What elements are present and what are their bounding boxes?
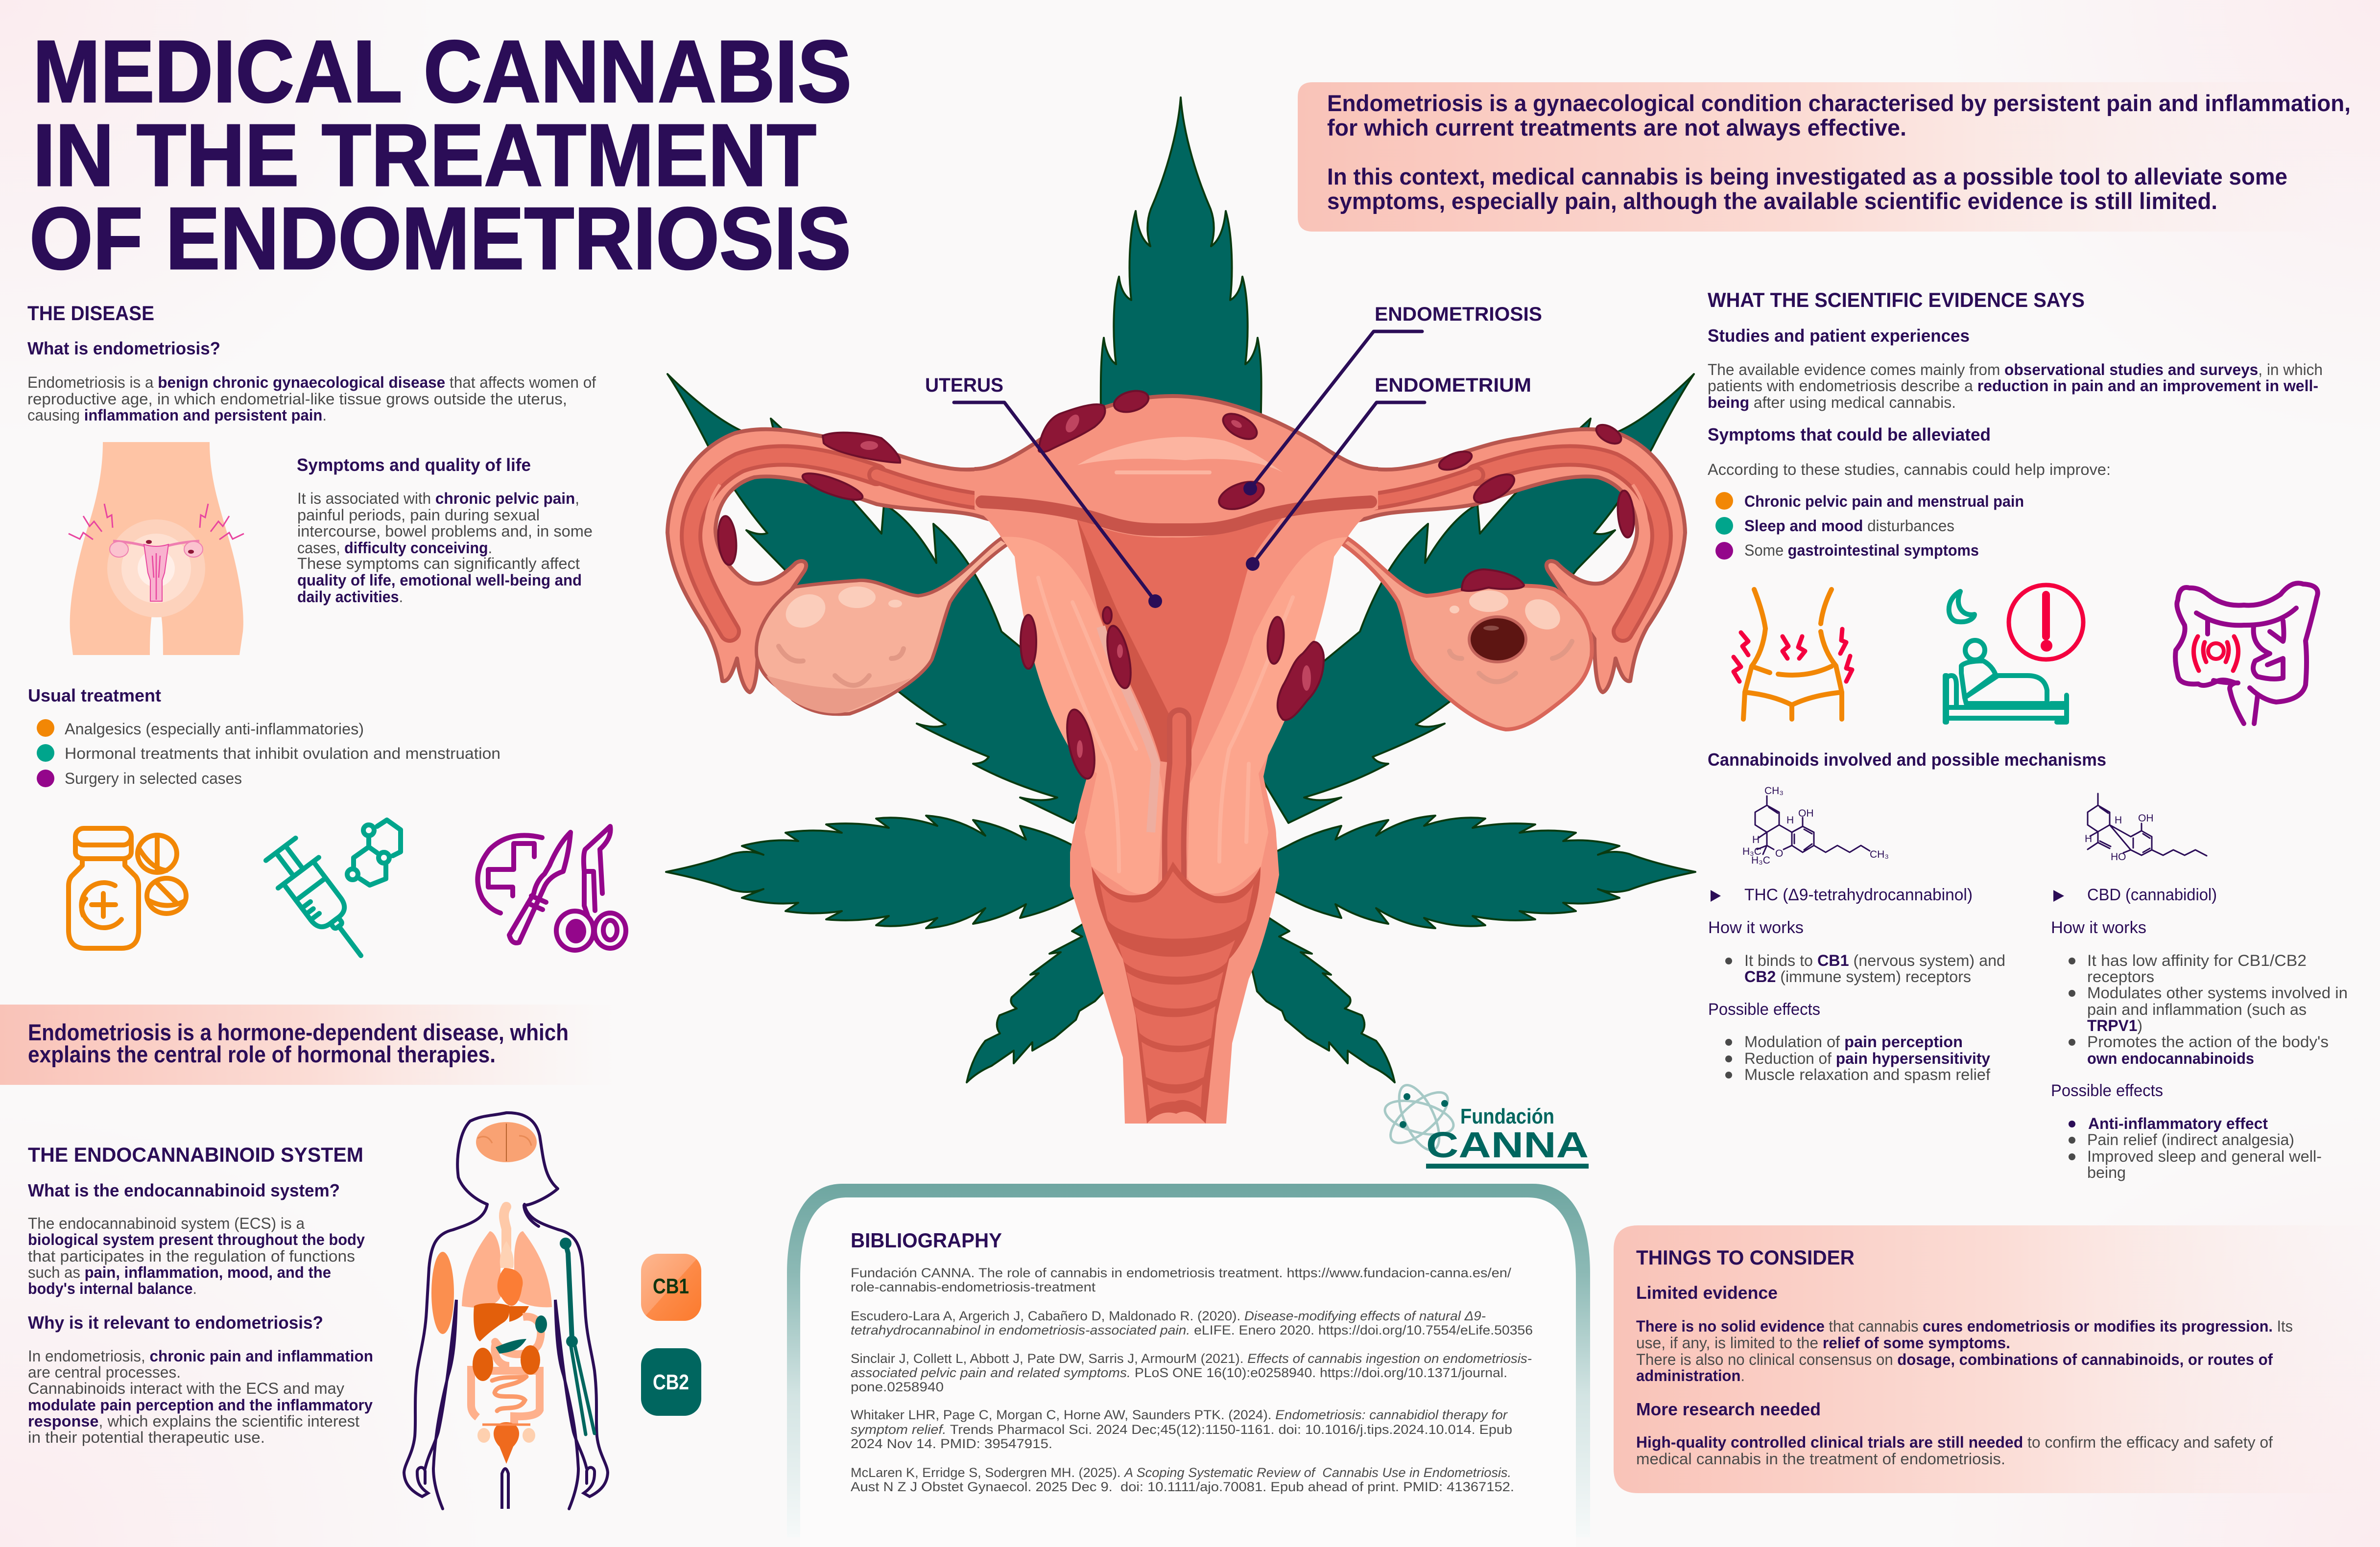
list: THC effects: Reduction of pain hypersensitivity [1744,1050,1990,1067]
illustration: cannabis leaf [666,97,1695,1082]
label: endometrium with leader line: ENDOMETRIUM [1375,375,1531,396]
subheading: symptoms alleviated: Symptoms that could be alleviated [1708,424,1991,445]
text: more research: High-quality controlled clinical trials are still needed to confirm the efficacy and safety of [1636,1433,2273,1451]
text: studies: being after using medical cannabis. [1708,394,1956,411]
list: treatments: Analgesics (especially anti-inflammatories) [65,720,364,738]
logo: Fundacion CANNA: CANNA [1426,1125,1589,1165]
text: limited evidence [1636,1317,2293,1384]
text: studies [1708,361,2323,411]
heading: CBD: CBD (cannabidiol) [2087,886,2217,904]
diagram: THC molecule: OH [1798,808,1814,819]
right cervical column [1188,537,1348,893]
icon: surgery tools [477,826,626,950]
subheading: more research: More research needed [1636,1399,1821,1419]
reference 4: 2024 Nov 14. PMID: 39547915. [851,1436,1052,1451]
uterus body silhouette [975,396,1378,1124]
panel: endocannabinoid system [28,1113,701,1509]
reference 1: Fundación CANNA. The role of cannabis in endometriosis treatment. https://www.fundacion-canna.es/en/ [851,1266,1512,1280]
text: symptoms: cases, difficulty conceiving. [297,539,492,557]
column: CBD [2051,886,2348,1181]
badge: CB2: CB2 [653,1370,689,1394]
subheading: cannabinoids: Cannabinoids involved and possible mechanisms [1708,750,2106,770]
text: symptoms: daily activities. [297,588,403,606]
subheading: usual treatment: Usual treatment [28,685,161,705]
heading: scientific evidence: WHAT THE SCIENTIFIC EVIDENCE SAYS [1708,288,2085,311]
reference 2: Escudero-Lara A, Argerich J, Cabañero D, Maldonado R. (2020). Disease-modifying effects of natural Δ9- [851,1309,1486,1323]
diagram: CBD molecule: H [2085,833,2092,844]
text: symptoms: quality of life, emotional well-being and [297,571,582,589]
icon: syringe and molecule [261,820,401,971]
text: relevance: Cannabinoids interact with the ECS and may [28,1380,344,1397]
label: endometriosis with leader line: ENDOMETRIOSIS [1375,304,1542,325]
reference 5 [851,1465,1514,1494]
diagram: THC molecule: CH₃ [1764,785,1784,797]
diagram: THC molecule: O [1775,848,1783,859]
subheading: studies: Studies and patient experiences [1708,326,1970,346]
text: according: According to these studies, cannabis could help improve: [1708,461,2111,478]
diagram: THC molecule: H₃C [1742,846,1761,857]
icon: sleep disturbance [1945,585,2083,722]
list: THC effects: Modulation of pain perception [1744,1033,1963,1051]
list: CBD effects [2069,1115,2322,1181]
diagram: CBD molecule: OH [2138,813,2154,824]
right ovary [1342,539,1592,729]
reference 3: associated pelvic pain and related symptoms. PLoS ONE 16(10):e0258940. https://doi.org/10.1371/journal. [851,1365,1507,1380]
panel: the disease [27,302,626,971]
text: ECS definition: The endocannabinoid system (ECS) is a [28,1215,305,1232]
vagina canal [1092,862,1261,1124]
heading: THC: THC (Δ9-tetrahydrocannabinol) [1744,886,1973,904]
list: THC effects [1725,1033,1990,1083]
text: definition: Endometriosis is a benign chronic gynaecological disease that affects women of [27,374,596,391]
marker: CBD [2053,890,2064,902]
text: symptoms: painful periods, pain during sexual [297,506,540,524]
reference 3: pone.0258940 [851,1380,944,1394]
title: OF ENDOMETRIOSIS [29,189,851,288]
diagram: THC molecule [1742,785,1889,866]
text: limited evidence: use, if any, is limited to the relief of some symptoms. [1636,1334,2010,1352]
subheading: limited evidence: Limited evidence [1636,1283,1778,1303]
reference 4 [851,1407,1512,1451]
subheading: what is endometriosis: What is endometriosis? [27,338,220,358]
text: relevance: modulate pain perception and the inflammatory [28,1396,373,1414]
left cervical column [1001,537,1163,894]
text: ECS definition [28,1215,365,1297]
list: CBD mechanism: TRPV1) [2087,1017,2142,1034]
endometriosis lesions [716,387,1636,781]
badge: CB2 [641,1348,701,1416]
badge: CB1: CB1 [653,1274,689,1298]
text: ECS definition: such as pain, inflammation, mood, and the [28,1264,331,1281]
subheading: possible effects: Possible effects [1708,1000,1820,1019]
diagram: THC molecule: H [1752,834,1760,845]
panel: bibliography [787,1184,1590,1547]
subheading: possible effects: Possible effects [2051,1081,2163,1100]
panel: intro callout: symptoms, especially pain, although the available scientific evidence is still limited. [1327,188,2217,214]
text: relevance: are central processes. [28,1363,181,1381]
list: CBD mechanism: It has low affinity for CB1/CB2 [2087,952,2307,969]
list: symptoms: Some gastrointestinal symptoms [1744,541,1979,559]
text: symptoms [297,490,593,606]
text: definition [27,374,596,424]
cervical canal [1174,720,1179,886]
diagram: THC molecule: H [1786,815,1794,826]
reference 1 [851,1266,1512,1294]
diagram: THC molecule: CH₃ [1870,849,1889,860]
list: CBD effects: Anti-inflammatory effect [2088,1115,2268,1132]
icon: abdominal pain [1734,589,1852,719]
column: THC [1708,886,2005,1083]
left fallopian tube [667,429,1068,692]
reference 2: tetrahydrocannabinol in endometriosis-associated pain. eLIFE. Enero 2020. https://doi.org/10.7554/eLife.50356 [851,1323,1533,1337]
endometrium cavity [1076,509,1289,764]
title: MEDICAL CANNABIS [33,23,852,121]
logo: Fundacion CANNA: Fundación [1460,1104,1554,1128]
text: ECS definition: body's internal balance. [28,1280,197,1297]
text: ECS definition: biological system present throughout the body [28,1231,365,1248]
text: relevance: in their potential therapeutic use. [28,1429,265,1446]
illustration: uterus [667,387,1685,1124]
panel: intro callout: Endometriosis is a gynaecological condition characterised by persistent pain and inflammation, [1327,90,2351,116]
panel: scientific evidence [1708,288,2348,1181]
diagram: CBD molecule: HO [2111,851,2126,863]
text: limited evidence: There is no solid evidence that cannabis cures endometriosis or modifies its progression. Its [1636,1317,2293,1335]
diagram: THC molecule: H₃C [1751,855,1770,866]
list: CBD effects: Pain relief (indirect analgesia) [2087,1131,2294,1149]
list: CBD effects: Improved sleep and general well- [2087,1148,2322,1165]
list: treatments: Surgery in selected cases [65,770,242,787]
text: relevance: In endometriosis, chronic pain and inflammation [28,1347,373,1365]
subheading: why relevant: Why is it relevant to endometriosis? [28,1313,323,1333]
fundus [975,396,1378,469]
list: CBD mechanism: Promotes the action of the body's [2087,1033,2329,1051]
text: relevance: response, which explains the scientific interest [28,1412,359,1430]
subheading: what is ECS: What is the endocannabinoid system? [28,1180,340,1200]
left ovary [756,539,1009,714]
reference 4: symptom relief. Trends Pharmacol Sci. 2024 Dec;45(12):1150-1161. doi: 10.1016/j.tips.2024.10.014. Epub [851,1422,1512,1437]
list: CBD mechanism: own endocannabinoids [2087,1050,2254,1067]
illustration: female body with organs [404,1113,608,1509]
text: relevance [28,1347,373,1446]
illustration: pelvis with pain [69,442,244,655]
icon: pill bottle [69,828,186,948]
reference 2 [851,1309,1533,1337]
subheading: how it works: How it works [1708,918,1804,937]
reference 1: role-cannabis-endometriosis-treatment [851,1280,1096,1294]
list: CBD mechanism [2069,952,2348,1067]
subheading: symptoms: Symptoms and quality of life [297,455,531,475]
list: THC effects: Muscle relaxation and spasm relief [1744,1066,1990,1083]
diagram: CBD molecule: H [2115,815,2122,826]
label: uterus with leader line: UTERUS [925,375,1003,396]
callout: hormone-dependent [0,1005,617,1085]
subheading: how it works: How it works [2051,918,2146,937]
heading: the disease: THE DISEASE [27,302,154,325]
list: CBD mechanism: pain and inflammation (such as [2087,1001,2307,1018]
heading: things to consider: THINGS TO CONSIDER [1636,1246,1855,1269]
reference 3: Sinclair J, Collett L, Abbott J, Pate DW, Sarris J, ArmourM (2021). Effects of cannabis ingestion on endometriosis- [851,1351,1532,1366]
list: CBD mechanism: receptors [2087,968,2154,985]
text: more research: medical cannabis in the treatment of endometriosis. [1636,1450,2005,1468]
label: endometriosis with leader line [1243,304,1542,495]
reference 5: McLaren K, Erridge S, Sodergren MH. (2025). A Scoping Systematic Review of Cannabis Use in Endometriosis. [851,1465,1511,1480]
text: symptoms: It is associated with chronic pelvic pain, [297,490,579,507]
text: symptoms: These symptoms can significantly affect [297,555,580,572]
icon: intestine pain [2175,583,2318,724]
list: THC mechanism: It binds to CB1 (nervous system) and [1744,952,2005,969]
list: THC mechanism: CB2 (immune system) receptors [1744,968,1971,985]
text: more research [1636,1433,2273,1468]
text: limited evidence: administration. [1636,1367,1745,1384]
list: treatments: Hormonal treatments that inhibit ovulation and menstruation [65,745,500,762]
text: definition: causing inflammation and persistent pain. [27,406,327,424]
callout: hormone-dependent: explains the central role of hormonal therapies. [28,1041,496,1067]
heading: bibliography: BIBLIOGRAPHY [851,1229,1002,1252]
text: studies: The available evidence comes mainly from observational studies and surveys, in which [1708,361,2323,378]
panel: intro callout: for which current treatments are not always effective. [1327,115,1906,141]
list: symptoms [1715,492,2024,560]
panel: intro callout: In this context, medical cannabis is being investigated as a possible tool to alleviate some [1327,164,2287,189]
heading: ECS: THE ENDOCANNABINOID SYSTEM [28,1143,363,1166]
list: symptoms: Sleep and mood disturbances [1744,517,1954,535]
text: limited evidence: There is also no clinical consensus on dosage, combinations of cannabinoids, or routes of [1636,1351,2273,1368]
fundus lower band [982,502,1371,530]
list: CBD mechanism: Modulates other systems involved in [2087,984,2348,1002]
text: ECS definition: that participates in the regulation of functions [28,1247,355,1265]
panel: intro callout [1298,82,2351,232]
list: treatments [37,719,500,787]
marker: THC [1711,890,1721,902]
callout: hormone-dependent: Endometriosis is a hormone-dependent disease, which [28,1019,569,1045]
text: studies: patients with endometriosis describe a reduction in pain and an improvement in well- [1708,377,2318,395]
text: symptoms: intercourse, bowel problems and, in some [297,522,593,540]
title: IN THE TREATMENT [33,106,816,205]
logo: Fundacion CANNA [1381,1079,1589,1169]
reference 5: Aust N Z J Obstet Gynaecol. 2025 Dec 9. doi: 10.1111/ajo.70081. Epub ahead of print. PMID: 41367152. [851,1479,1514,1494]
reference 4: Whitaker LHR, Page C, Morgan C, Horne AW, Saunders PTK. (2024). Endometriosis: cannabidiol therapy for [851,1407,1508,1422]
label: uterus with leader line [925,375,1162,608]
text: definition: reproductive age, in which endometrial-like tissue grows outside the uterus, [27,390,567,408]
diagram: CBD molecule [2085,794,2207,863]
badge: CB1 [641,1254,701,1321]
label: endometrium with leader line [1246,375,1531,571]
title [29,23,852,288]
reference 3 [851,1351,1532,1394]
list: CBD effects: being [2087,1164,2126,1181]
list: THC mechanism [1725,952,2005,985]
panel: things to consider [1614,1225,2380,1493]
list: symptoms: Chronic pelvic pain and menstrual pain [1744,492,2024,510]
